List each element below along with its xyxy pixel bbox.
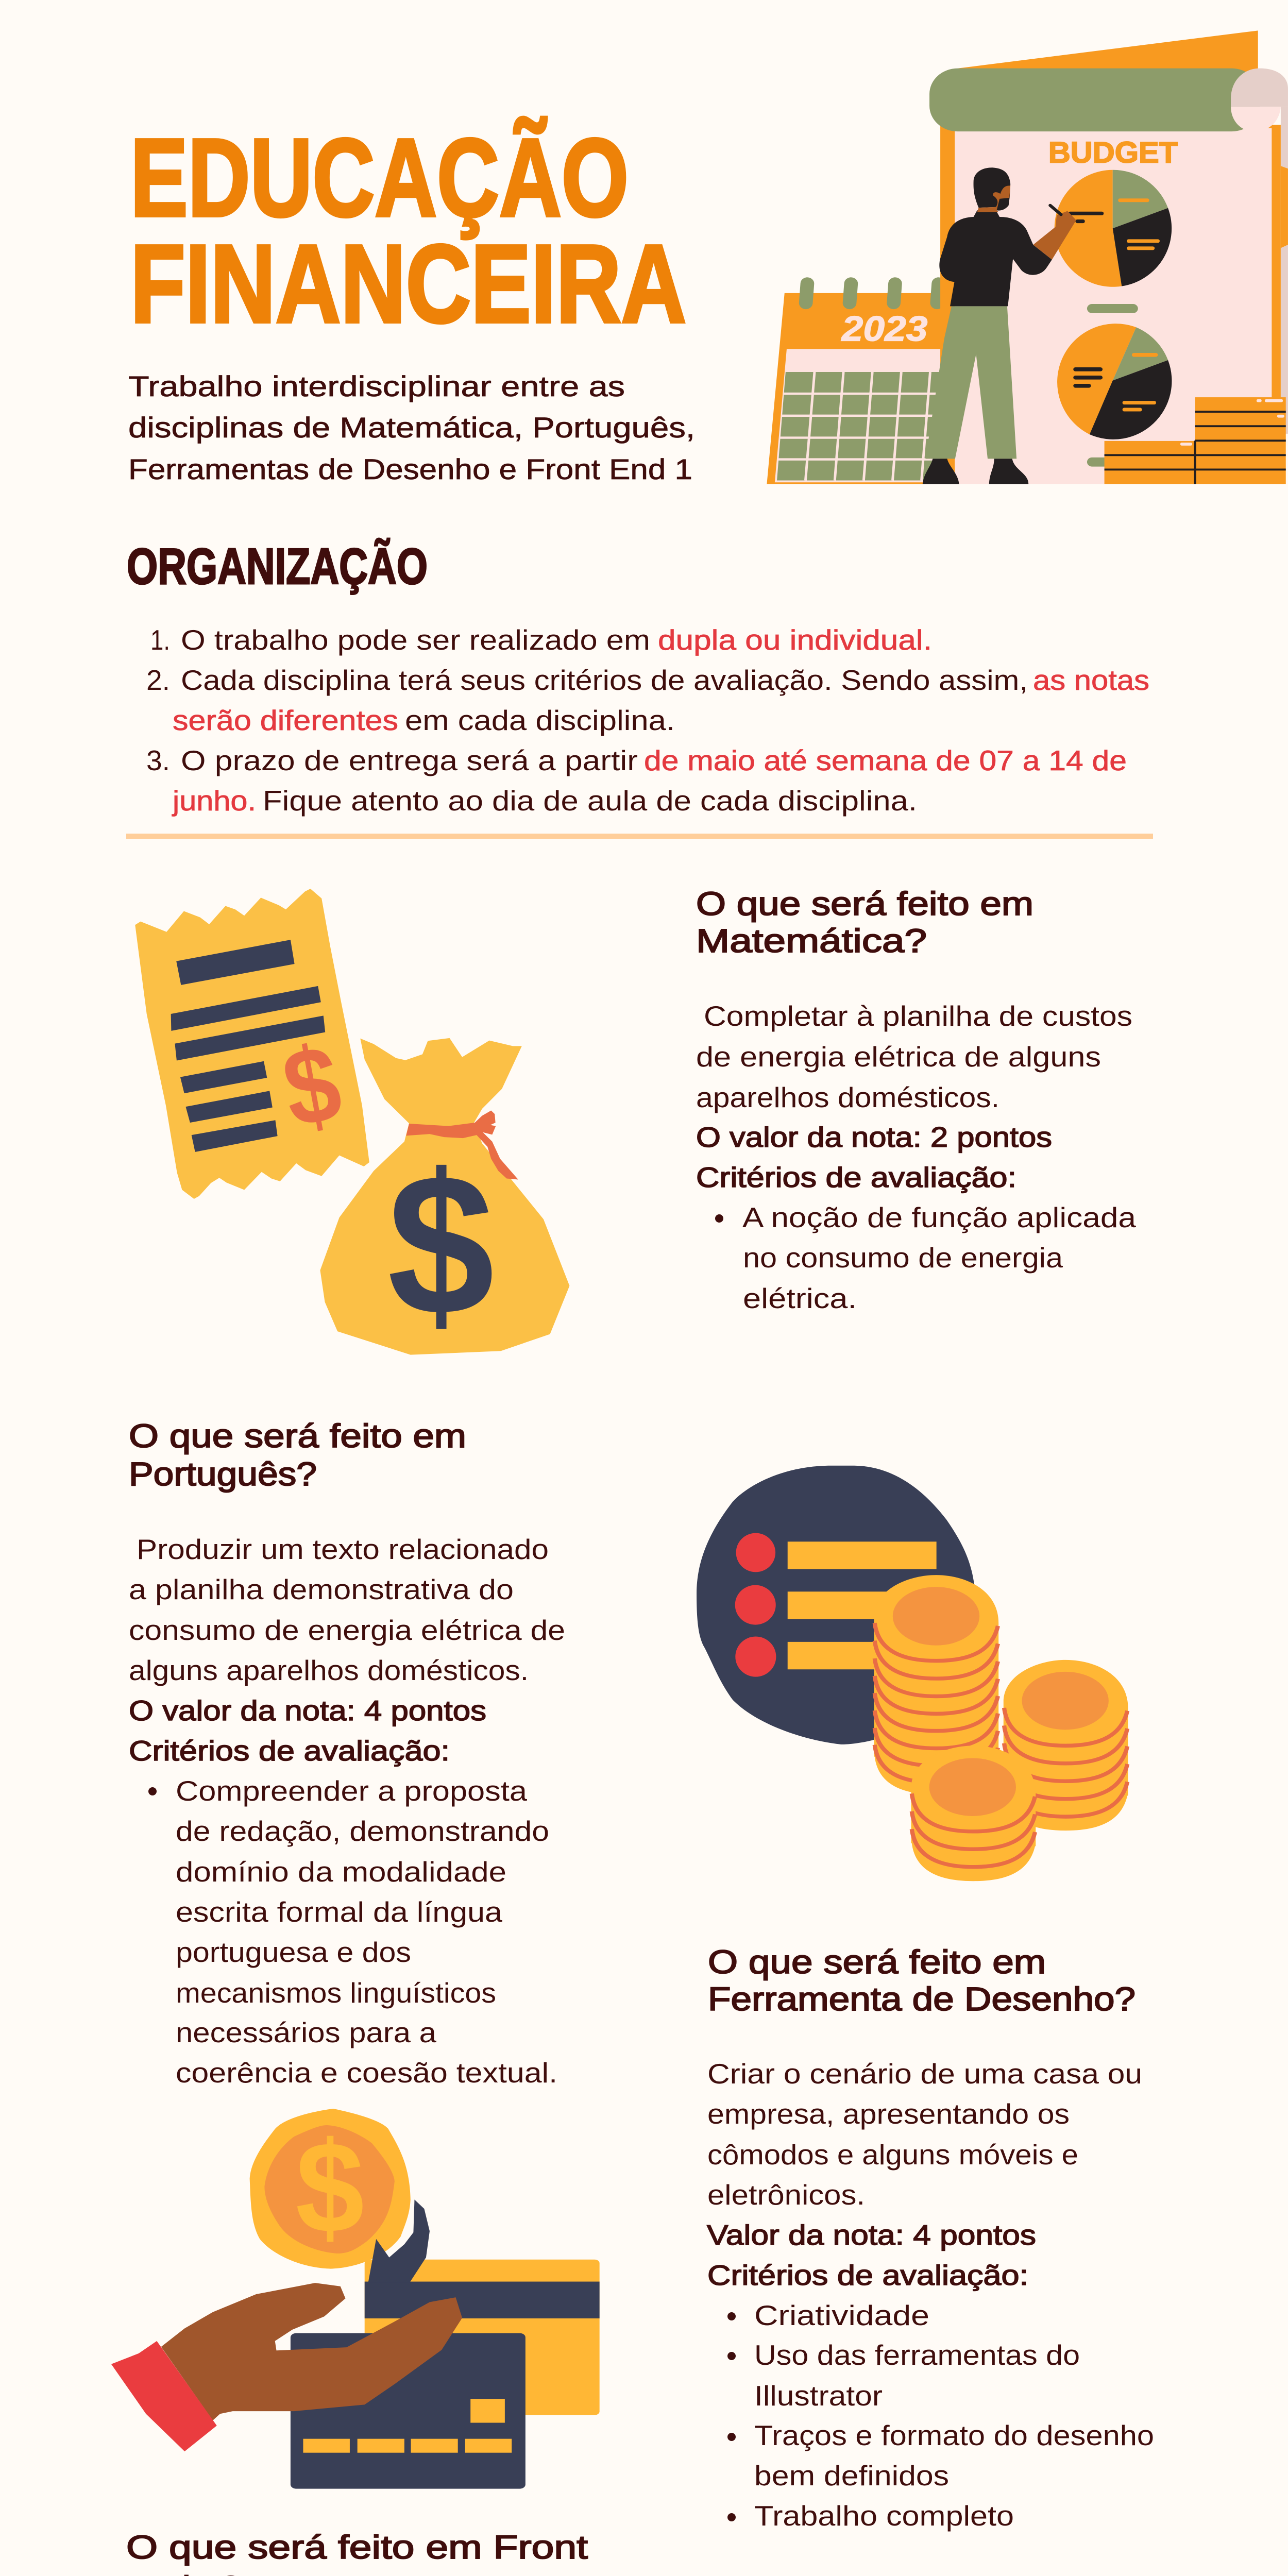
list: organização: as notas [1033,664,1149,696]
text block: ferramenta de desenho: Trabalho completo [754,2500,1014,2532]
budget board [929,30,1288,484]
text block: ferramenta de desenho: Traços e formato do desenho [754,2419,1154,2451]
heading: matemática: Matemática? [696,922,927,959]
list: organização [146,624,1149,817]
heading: matemática: O que será feito em [696,885,1033,922]
icon: coin stack right [1004,1660,1128,1831]
heading: português: Português? [129,1455,317,1493]
text block: ferramenta de desenho: Criatividade [754,2299,929,2331]
list: organização: de maio até semana de 07 a 14 de [644,744,1127,776]
text block: português: a planilha demonstrativa do [129,1573,514,1605]
text block: ferramenta de desenho: Illustrator [754,2380,883,2412]
text block: matemática: de energia elétrica de alguns [696,1041,1101,1073]
pie chart: top [1055,170,1172,287]
list: organização: 1. [150,624,170,656]
list: organização: junho. [172,785,256,817]
list: organização: Cada disciplina terá seus critérios de avaliação. Sendo assim, [181,664,1028,696]
text block: português [129,1533,565,2089]
icon: yellow card [365,2199,600,2415]
icon: money bag [320,1038,569,1357]
icon: receipt: $ [274,1022,350,1150]
icon: banknote stacks [1105,397,1286,484]
illustration: receipt and money bag [135,889,569,1357]
text block: português: Compreender a proposta [176,1775,527,1807]
heading: front end 1: O que será feito em Front [126,2529,588,2566]
heading: matemática [696,885,1033,959]
text block: matemática: no consumo de energia [743,1242,1063,1274]
list: organização: Fique atento ao dia de aula de cada disciplina. [263,785,917,817]
text block: português: necessários para a [176,2016,436,2048]
text block: matemática: Completar à planilha de custos [704,1000,1132,1032]
list: organização: serão diferentes [173,704,398,736]
panel: matemática [696,885,1136,1314]
text block: português: consumo de energia elétrica de [129,1614,565,1646]
list: organização: dupla ou individual. [658,624,932,656]
subtitle: Ferramentas de Desenho e Front End 1 [128,453,692,485]
icon: receipt [135,889,369,1199]
text block: português: de redação, demonstrando [176,1815,549,1847]
text block: ferramenta de desenho: bem definidos [754,2460,949,2492]
list: organização: 3. [146,744,170,776]
subtitle: Trabalho interdisciplinar entre as [128,370,625,402]
text block: ferramenta de desenho: Criar o cenário de uma casa ou [707,2058,1142,2090]
list: organização: em cada disciplina. [405,704,675,736]
text block: ferramenta de desenho: eletrônicos. [707,2179,865,2211]
text block: matemática: A noção de função aplicada [742,1201,1136,1233]
list: organização: 2. [146,664,170,696]
illustration: budget presentation [767,30,1288,484]
panel: português [129,1417,565,2089]
text block: português: mecanismos linguísticos [176,1977,496,2009]
text block: ferramenta de desenho: Valor da nota: 4 pontos [707,2219,1036,2251]
text block: português: domínio da modalidade [176,1856,506,1888]
icon: hand [111,2283,462,2451]
panel: ferramenta de desenho [707,1943,1154,2532]
text block: português: Critérios de avaliação: [129,1735,450,1767]
text block: ferramenta de desenho: cômodos e alguns móveis e [707,2139,1078,2171]
pie chart: bottom [1057,324,1172,439]
panel: front end 1 [125,2529,588,2576]
text block: português: coerência e coesão textual. [176,2057,557,2089]
text block: português: Produzir um texto relacionado [137,1533,549,1565]
illustration: list and coin stacks [697,1466,1128,1881]
list: organização: O trabalho pode ser realizado em [181,624,650,656]
icon: money bag: $ [387,1132,495,1357]
text block: matemática: elétrica. [743,1282,857,1314]
text block: português: alguns aparelhos domésticos. [129,1654,529,1686]
text block: ferramenta de desenho: empresa, apresentando os [707,2098,1070,2130]
icon: coin stack back [874,1575,998,1794]
figure: man pointing at chart [923,167,1076,484]
text block: português: portuguesa e dos [176,1936,411,1968]
icon: navy card [291,2333,526,2489]
text block: ferramenta de desenho: Uso das ferramentas do [754,2339,1080,2371]
text block: matemática [696,1000,1136,1314]
title: FINANCEIRA [130,222,686,346]
heading: organização: ORGANIZAÇÃO [127,538,428,595]
text block: matemática: aparelhos domésticos. [696,1081,999,1113]
heading: front end 1 [126,2529,588,2576]
heading: ferramenta de desenho: Ferramenta de Desenho? [708,1980,1136,2018]
text block: português: O valor da nota: 4 pontos [129,1694,486,1726]
subtitle: disciplinas de Matemática, Português, [128,411,695,444]
icon: calendar 2023 [767,283,953,484]
icon: coin [250,2109,411,2269]
title: EDUCAÇÃO [130,115,629,240]
icon: calendar 2023: 2023 [841,309,928,349]
text block: matemática: O valor da nota: 2 pontos [696,1121,1052,1153]
heading: português: O que será feito em [129,1417,466,1454]
list: organização: O prazo de entrega será a partir [181,744,638,776]
heading: ferramenta de desenho: O que será feito em [708,1943,1046,1980]
icon: coin stack front [911,1745,1036,1881]
text block: ferramenta de desenho: Critérios de avaliação: [707,2259,1028,2291]
illustration: hand, coin and cards [111,2109,600,2489]
title [130,115,686,346]
heading: português [129,1417,466,1493]
text block: matemática: Critérios de avaliação: [696,1161,1016,1193]
heading: ferramenta de desenho [708,1943,1136,2018]
subtitle [128,370,695,485]
text block: português: escrita formal da língua [176,1896,502,1928]
icon: list blob [697,1466,974,1744]
icon: coin: $ [296,2115,364,2260]
text block: ferramenta de desenho [707,2058,1154,2532]
budget board: BUDGET [1048,135,1178,169]
